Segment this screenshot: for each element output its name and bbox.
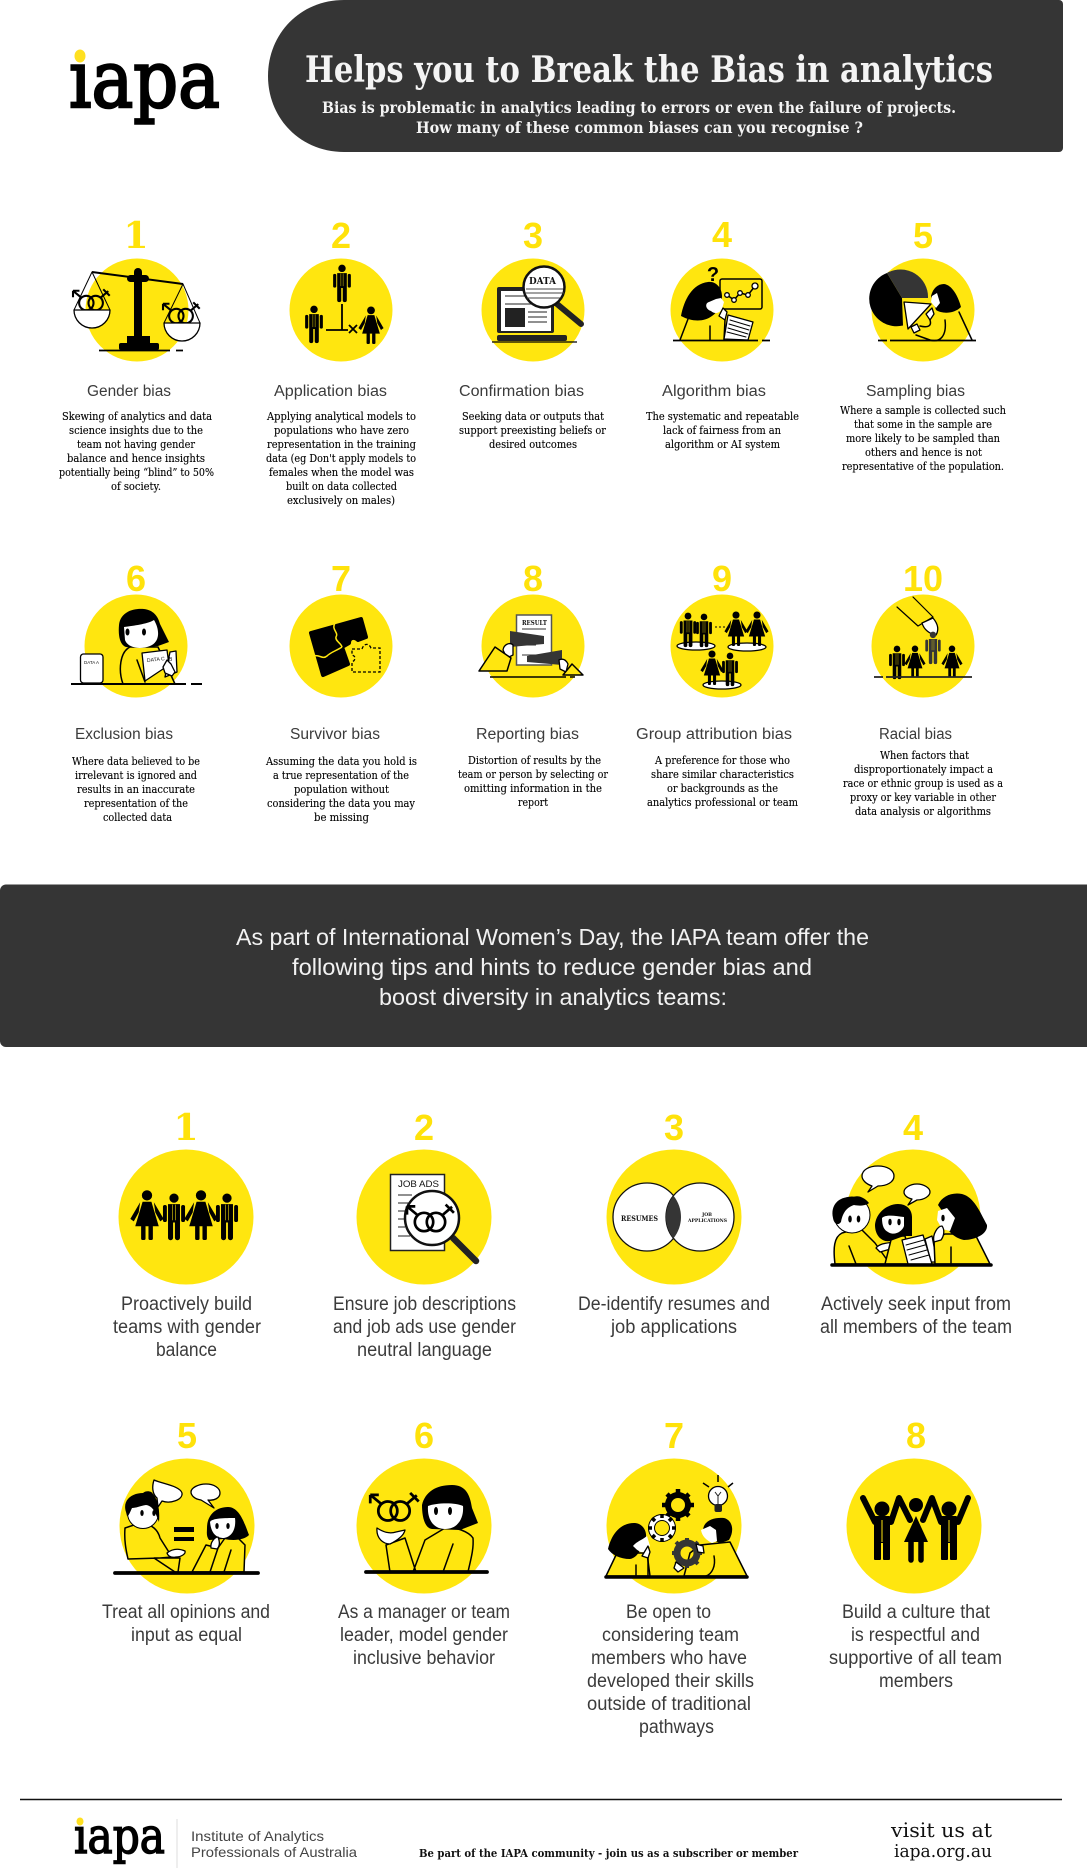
tip 5 [102, 1415, 270, 1646]
icon: hands censoring report [479, 594, 584, 698]
heading: Application bias [274, 383, 387, 400]
footer website [890, 1818, 992, 1862]
footer organisation name [191, 1828, 357, 1860]
text: input as equal [131, 1625, 242, 1646]
heading: Sampling bias [866, 383, 965, 400]
header banner [268, 0, 1063, 152]
description: a true representation of the [273, 769, 409, 782]
text: Ensure job descriptions [333, 1294, 516, 1315]
heading: Group attribution bias [636, 726, 792, 743]
description: A preference for those who [654, 754, 790, 767]
number: 6 [414, 1415, 434, 1456]
text [829, 1602, 1002, 1692]
icon: balanced team [118, 1150, 254, 1284]
description: The systematic and repeatable [646, 410, 799, 423]
description: Skewing of analytics and data [62, 410, 213, 423]
icon: scales [73, 258, 200, 362]
icon: person with documents: B [169, 657, 173, 663]
icon: people with axis [290, 258, 392, 362]
panel: survivor bias [265, 558, 417, 824]
description: results in an inaccurate [77, 783, 195, 796]
heading: Racial bias [879, 726, 952, 743]
banner: International Women's Day: As part of International Women’s Day, the IAPA team offer the [236, 924, 869, 950]
tip 1 [113, 1107, 262, 1361]
heading: Survivor bias [290, 726, 380, 743]
description: females when the model was [269, 466, 414, 479]
description: Where data believed to be [72, 755, 200, 768]
description: collected data [103, 811, 173, 824]
description: built on data collected [286, 480, 397, 493]
text: Actively seek input from [821, 1294, 1011, 1315]
icon: person with documents [71, 594, 202, 698]
description: lack of fairness from an [663, 424, 781, 437]
banner: International Women's Day: following tips and hints to reduce gender bias and [292, 954, 812, 980]
description [59, 410, 214, 493]
panel: gender bias [59, 215, 214, 493]
text [333, 1294, 517, 1361]
tip 6 [338, 1415, 510, 1669]
text [820, 1294, 1012, 1338]
text: and job ads use gender [333, 1317, 517, 1338]
description: others and hence is not [865, 446, 983, 459]
description: team or person by selecting or [458, 768, 609, 781]
panel: reporting bias [458, 558, 609, 809]
number 9: 9 [712, 558, 732, 599]
number 10: 10 [903, 558, 943, 599]
icon: person with chart [670, 258, 774, 362]
text: is respectful and [851, 1625, 980, 1646]
text: neutral language [357, 1340, 492, 1361]
description: report [518, 796, 549, 809]
number: 8 [906, 1415, 926, 1456]
text: members [879, 1671, 953, 1692]
number 6: 6 [126, 558, 146, 599]
panel: group attribution bias [636, 558, 798, 809]
tip 2 [333, 1107, 517, 1361]
description: algorithm or AI system [665, 438, 780, 451]
icon: hand picking person [872, 594, 974, 698]
description: disproportionately impact a [854, 763, 994, 776]
icon: venn diagram [606, 1150, 742, 1284]
icon: leader holding gender symbol [356, 1458, 492, 1594]
number: 4 [903, 1107, 923, 1148]
icon: pie chart and person [869, 258, 976, 362]
number 3: 3 [523, 215, 543, 256]
footer website: iapa.org.au [894, 1841, 992, 1862]
number 7: 7 [331, 558, 351, 599]
text: Be open to [626, 1602, 711, 1623]
text: Build a culture that [842, 1602, 991, 1623]
number 2: 2 [331, 215, 351, 256]
footer logo: iapa [74, 1807, 165, 1865]
description: population without [294, 783, 390, 796]
description: Seeking data or outputs that [462, 410, 605, 423]
panel: confirmation bias [459, 215, 607, 451]
description: Distortion of results by the [468, 754, 601, 767]
tip 7 [587, 1415, 754, 1738]
description [843, 749, 1004, 818]
description: proxy or key variable in other [850, 791, 997, 804]
icon: team discussion [832, 1150, 991, 1284]
icon: job ads magnifier [356, 1150, 492, 1284]
icon: venn diagram: JOB [701, 1212, 712, 1218]
description: that some in the sample are [854, 418, 992, 431]
description: team not having gender [77, 438, 196, 451]
panel: application bias [266, 215, 416, 507]
banner: International Women's Day [0, 884, 1087, 1047]
panel: exclusion bias [71, 558, 202, 824]
description: considering the data you may [267, 797, 415, 810]
panel: algorithm bias [646, 214, 799, 451]
text [338, 1602, 510, 1669]
icon: job ads magnifier: JOB ADS [398, 1179, 439, 1190]
number 5: 5 [913, 215, 933, 256]
icon: puzzle with missing piece [290, 594, 392, 698]
description: race or ethnic group is used as a [843, 777, 1004, 790]
description: of society. [111, 480, 161, 493]
number: 7 [664, 1415, 684, 1456]
description [840, 404, 1006, 473]
description [646, 410, 799, 451]
heading: Exclusion bias [75, 726, 173, 743]
logo: iapa: iapa [69, 33, 220, 126]
description [647, 754, 798, 809]
text [102, 1602, 270, 1646]
icon: venn diagram: APPLICATIONS [687, 1218, 727, 1224]
footer call to action: Be part of the IAPA community - join us as a subscriber or member [419, 1846, 799, 1860]
icon: gears, bulb and people [606, 1458, 747, 1594]
description: desired outcomes [489, 438, 577, 451]
text [587, 1602, 754, 1738]
footer website: visit us at [890, 1818, 992, 1842]
footer organisation name: Institute of Analytics [191, 1828, 324, 1844]
description [459, 410, 607, 451]
text [578, 1294, 770, 1338]
text: Treat all opinions and [102, 1602, 270, 1623]
text: all members of the team [820, 1317, 1012, 1338]
description: omitting information in the [464, 782, 602, 795]
icon: two people equal [115, 1458, 258, 1594]
description: support preexisting beliefs or [459, 424, 607, 437]
description: potentially being “blind” to 50% [59, 466, 214, 479]
description: exclusively on males) [287, 494, 395, 507]
description [265, 755, 417, 824]
text: developed their skills [587, 1671, 754, 1692]
number: 3 [664, 1107, 684, 1148]
text: Proactively build [121, 1294, 252, 1315]
description: irrelevant is ignored and [75, 769, 197, 782]
icon: person with documents: DATA C [147, 656, 166, 664]
tip 8 [829, 1415, 1002, 1692]
number 1: 1 [123, 215, 149, 257]
description: share similar characteristics [651, 768, 794, 781]
description: or backgrounds as the [667, 782, 778, 795]
icon: groups of people [670, 594, 774, 698]
description: populations who have zero [274, 424, 409, 437]
description: representation of the [84, 797, 188, 810]
description: Applying analytical models to [266, 410, 416, 423]
text: As a manager or team [338, 1602, 510, 1623]
text: supportive of all team [829, 1648, 1002, 1669]
text: job applications [610, 1317, 737, 1338]
number: 5 [177, 1415, 197, 1456]
description: data (eg Don't apply models to [266, 452, 416, 465]
number: 2 [414, 1107, 434, 1148]
number 8: 8 [523, 558, 543, 599]
subtitle [322, 98, 956, 137]
description [266, 410, 416, 507]
tip 3 [578, 1107, 770, 1338]
subtitle: Bias is problematic in analytics leading to errors or even the failure of projects. [322, 98, 956, 117]
icon: person with chart: ? [707, 264, 719, 286]
tip 4 [820, 1107, 1012, 1338]
heading: Algorithm bias [662, 383, 766, 400]
description [458, 754, 609, 809]
text: pathways [639, 1717, 714, 1738]
icon: laptop and magnifier [482, 258, 584, 362]
text: outside of traditional [587, 1694, 751, 1715]
panel: sampling bias [840, 215, 1006, 473]
description [72, 755, 200, 824]
description: be missing [314, 811, 369, 824]
description: analytics professional or team [647, 796, 798, 809]
number: 1 [173, 1107, 199, 1149]
text: inclusive behavior [353, 1648, 496, 1669]
icon: team with raised arms [846, 1458, 982, 1594]
icon: hands censoring report: RESULT [522, 619, 547, 627]
banner: International Women's Day: boost diversity in analytics teams: [379, 984, 727, 1010]
description: Assuming the data you hold is [265, 755, 417, 768]
description: representation in the training [267, 438, 416, 451]
number 4: 4 [712, 214, 732, 255]
heading: Confirmation bias [459, 383, 584, 400]
subtitle: How many of these common biases can you recognise ? [416, 118, 863, 137]
text: De-identify resumes and [578, 1294, 770, 1315]
description: When factors that [880, 749, 970, 762]
icon: laptop and magnifier: DATA [529, 277, 557, 287]
heading: Gender bias [87, 383, 171, 400]
description: data analysis or algorithms [855, 805, 991, 818]
icon: person with documents: DATA A [84, 660, 99, 665]
text: considering team [602, 1625, 739, 1646]
text: leader, model gender [340, 1625, 509, 1646]
description: science insights due to the [69, 424, 203, 437]
description: balance and hence insights [67, 452, 205, 465]
text: members who have [591, 1648, 747, 1669]
footer organisation name: Professionals of Australia [191, 1844, 357, 1860]
icon: venn diagram: RESUMES [621, 1214, 658, 1223]
description: Where a sample is collected such [840, 404, 1006, 417]
description: representative of the population. [842, 460, 1004, 473]
text: teams with gender [113, 1317, 262, 1338]
text [113, 1294, 262, 1361]
heading: Reporting bias [476, 726, 579, 743]
panel: racial bias [843, 558, 1004, 818]
text: balance [156, 1340, 217, 1361]
description: more likely to be sampled than [846, 432, 1000, 445]
